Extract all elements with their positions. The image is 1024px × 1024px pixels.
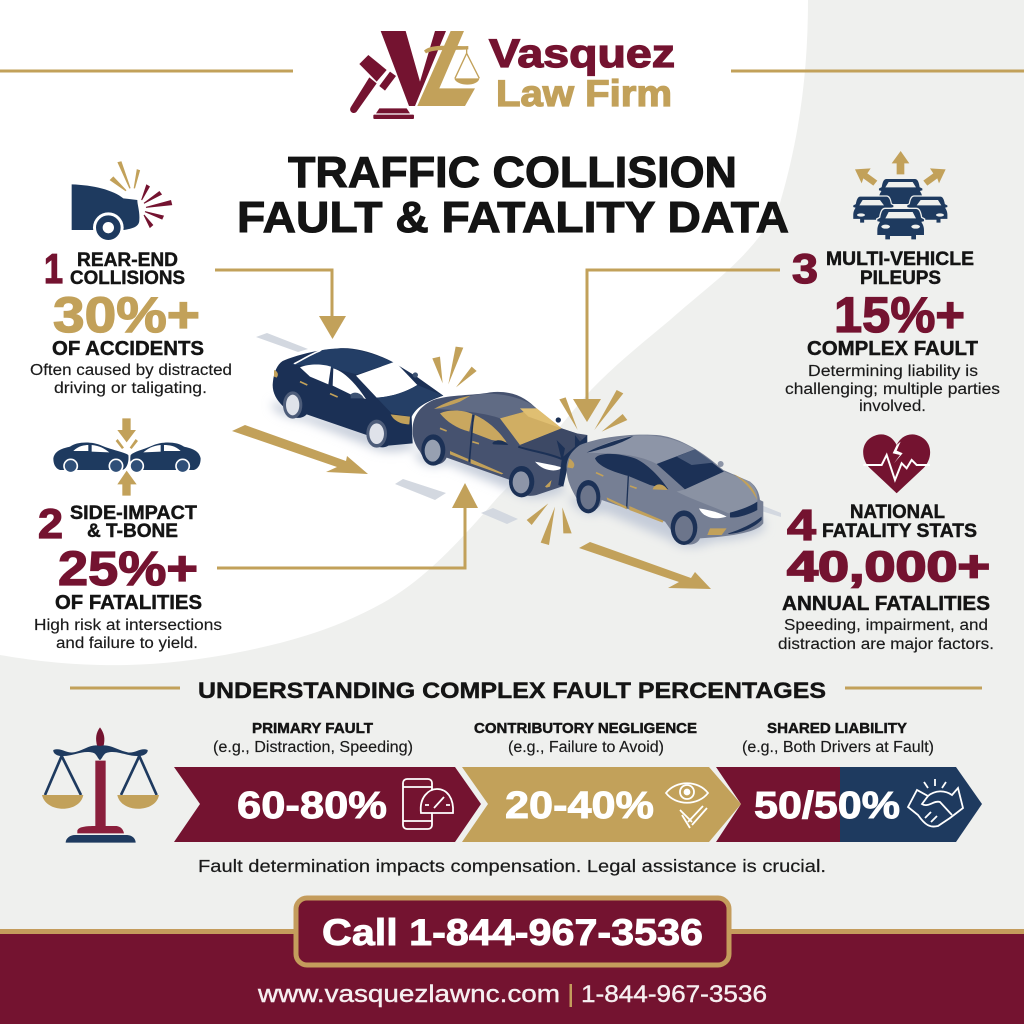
icon: broken heart with pulse — [863, 434, 930, 493]
panel 4: national fatality stats — [778, 434, 994, 653]
title: TRAFFIC COLLISION — [288, 148, 737, 197]
chevron: 50/50% — [716, 767, 982, 842]
chevron: 60-80% — [174, 767, 481, 842]
panel 4: national fatality stats: distraction are major factors. — [778, 636, 994, 653]
call button — [296, 898, 729, 965]
fault column: contributory negligence: CONTRIBUTORY NEGLIGENCE — [474, 721, 697, 737]
title — [237, 148, 789, 242]
title: FAULT & FATALITY DATA — [237, 193, 789, 242]
call button: Call 1-844-967-3536 — [322, 912, 703, 953]
panel 4: national fatality stats: NATIONAL — [850, 502, 945, 523]
icon: handshake — [908, 779, 963, 827]
panel 1: rear-end collisions: Often caused by distracted — [30, 362, 232, 379]
numeral 1: 1 — [44, 245, 63, 292]
icon: scales of justice — [42, 727, 159, 843]
fault column: shared liability: SHARED LIABILITY — [767, 721, 907, 737]
numeral 3: 3 — [792, 245, 818, 292]
car 3: grey — [567, 435, 763, 545]
panel 1: rear-end collisions — [30, 162, 232, 397]
motion arrows — [232, 425, 711, 589]
panel 3: multi-vehicle pileups: challenging; multiple parties — [785, 381, 1000, 398]
fault column: primary fault: PRIMARY FAULT — [252, 721, 373, 737]
stat: 25%+: 25%+ — [58, 543, 198, 596]
fault column: primary fault: (e.g., Distraction, Speeding) — [213, 739, 413, 756]
panel 3: multi-vehicle pileups: COMPLEX FAULT — [807, 338, 978, 360]
fault column: contributory negligence: (e.g., Failure to Avoid) — [508, 739, 664, 756]
callout arrow: rear-end to car 1 — [215, 270, 346, 339]
panel 4: national fatality stats: ANNUAL FATALITIES — [782, 593, 990, 615]
panel 3: multi-vehicle pileups: Determining liability is — [808, 363, 978, 380]
section heading: complex fault: UNDERSTANDING COMPLEX FAULT PERCENTAGES — [198, 678, 826, 703]
footer band — [0, 929, 1024, 1024]
footer contact line: 1-844-967-3536 — [581, 981, 767, 1008]
icon: eye and hand — [666, 783, 708, 828]
footer contact line: www.vasquezlawnc.com — [257, 981, 560, 1008]
logo: Vasquez Law Firm: Vasquez — [489, 32, 675, 76]
fault column: shared liability: (e.g., Both Drivers at Fault) — [742, 739, 934, 756]
panel 4: national fatality stats: FATALITY STATS — [822, 521, 977, 542]
panel 3: multi-vehicle pileups: involved. — [859, 398, 926, 415]
panel 3: multi-vehicle pileups: PILEUPS — [860, 268, 941, 289]
icon: phone and speedometer — [403, 779, 453, 829]
panel 1: rear-end collisions: OF ACCIDENTS — [52, 338, 204, 360]
panel 2: side-impact and T-bone: & T-BONE — [87, 521, 178, 542]
callout arrow: pileup to collision — [573, 270, 780, 422]
numeral 2: 2 — [38, 500, 63, 547]
callout arrow: side-impact to collision — [217, 483, 478, 568]
fault column: shared liability — [716, 721, 982, 842]
panel 2: side-impact and T-bone: SIDE-IMPACT — [70, 503, 197, 524]
panel 3: multi-vehicle pileups — [785, 151, 1000, 415]
impact sparks — [432, 347, 627, 545]
icon: pileup cars — [853, 151, 948, 240]
panel 2: side-impact and T-bone: OF FATALITIES — [55, 592, 202, 614]
panel 2: side-impact and T-bone: and failure to yield. — [56, 635, 198, 652]
stat: 30%+: 30%+ — [53, 287, 200, 343]
note: fault determination: Fault determination impacts compensation. Legal assistance is crucial. — [198, 856, 826, 876]
numeral 4: 4 — [787, 501, 817, 550]
fault column: contributory negligence: 20-40% — [505, 785, 654, 827]
car 2: slate with gold windows — [413, 392, 587, 497]
footer contact line — [257, 981, 767, 1008]
icon: head-on cars — [53, 418, 201, 496]
fault column: primary fault — [174, 721, 481, 842]
stat: 15%+: 15%+ — [834, 287, 965, 343]
logo: Vasquez Law Firm — [350, 31, 675, 119]
fault column: primary fault: 60-80% — [237, 785, 387, 827]
panel 1: rear-end collisions: COLLISIONS — [70, 268, 185, 289]
panel 2: side-impact and T-bone: High risk at intersections — [34, 617, 222, 634]
icon: rear-end crash — [72, 162, 172, 243]
stat: 40,000+: 40,000+ — [787, 543, 990, 591]
fault column: shared liability: 50/50% — [754, 785, 900, 827]
car 1: navy — [273, 348, 443, 448]
panel 3: multi-vehicle pileups: MULTI-VEHICLE — [826, 249, 974, 270]
panel 1: rear-end collisions: REAR-END — [77, 250, 178, 271]
panel 2: side-impact and T-bone — [34, 418, 222, 652]
fault column: contributory negligence — [462, 721, 741, 842]
central illustration: three-car collision — [232, 333, 781, 589]
logo: Vasquez Law Firm: Law Firm — [496, 73, 672, 114]
chevron: 20-40% — [462, 767, 741, 842]
panel 1: rear-end collisions: driving or taligating. — [54, 380, 207, 397]
panel 4: national fatality stats: Speeding, impairment, and — [784, 617, 988, 634]
